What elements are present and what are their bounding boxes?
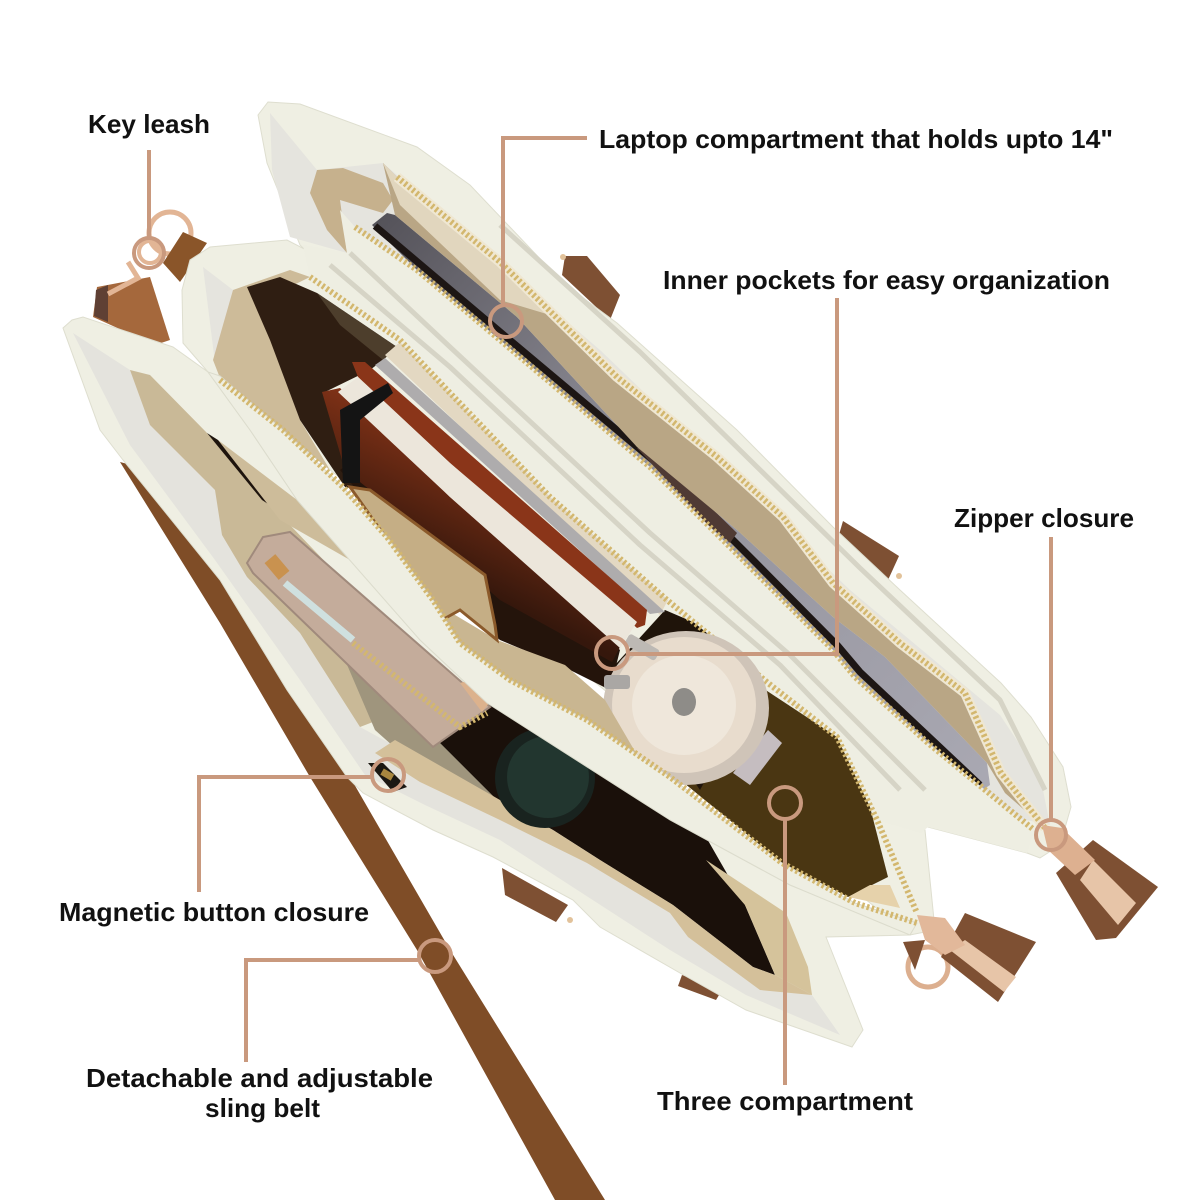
wallet [247,532,490,747]
water bottle [603,631,782,785]
olive interior [684,650,888,897]
magnetic button [368,763,407,792]
back compartment [258,102,1071,858]
callout: laptop compartment: Laptop compartment that holds upto 14" [599,124,1113,154]
callout: magnetic button closure: Magnetic button closure [59,897,369,927]
laptop sleeve tab [637,448,737,543]
khaki pouch under zipper [430,600,640,760]
callout: magnetic button closure [59,759,404,927]
callout: key leash [88,109,210,268]
callout: inner pockets [596,265,1110,669]
notebook [322,358,665,662]
callout: three compartment: Three compartment [657,1086,913,1116]
dark interior [247,277,397,490]
callout: detachable sling belt: Detachable and adjustable [86,1063,433,1093]
outer back zipper [397,177,1045,828]
callout: inner pockets: Inner pockets for easy organization [663,265,1110,295]
callout: laptop compartment [490,124,1113,337]
shadow zone [345,660,500,803]
dark green flask [495,728,595,828]
dark interior [400,650,775,975]
zipper pull: middle [903,913,1036,1002]
khaki lining [213,270,330,470]
callout: three compartment [657,787,913,1116]
khaki lining upper [130,370,430,727]
laptop [372,213,990,795]
khaki lining lower [375,740,812,995]
callout: zipper closure [954,503,1134,850]
patent pocket fabric [350,487,497,640]
upper strap and key leash [93,212,207,345]
sling belt strap [120,462,605,1200]
callout: detachable sling belt [86,940,451,1123]
beige inner pocket [706,860,812,995]
callout: detachable sling belt: sling belt [205,1093,320,1123]
outside tabs [502,254,902,1000]
divider between back and middle compartments [303,210,1034,913]
inner back zipper [355,227,1034,830]
khaki pocket between laptop and zipper [383,163,1030,815]
khaki back lining [310,168,393,253]
callout: key leash: Key leash [88,109,210,139]
middle compartment base [182,240,935,935]
callout: zipper closure: Zipper closure [954,503,1134,533]
rear middle zipper [385,342,668,615]
zipper pull: back [1042,825,1158,940]
front zipper band [208,372,917,935]
front compartment panel [63,317,910,1047]
